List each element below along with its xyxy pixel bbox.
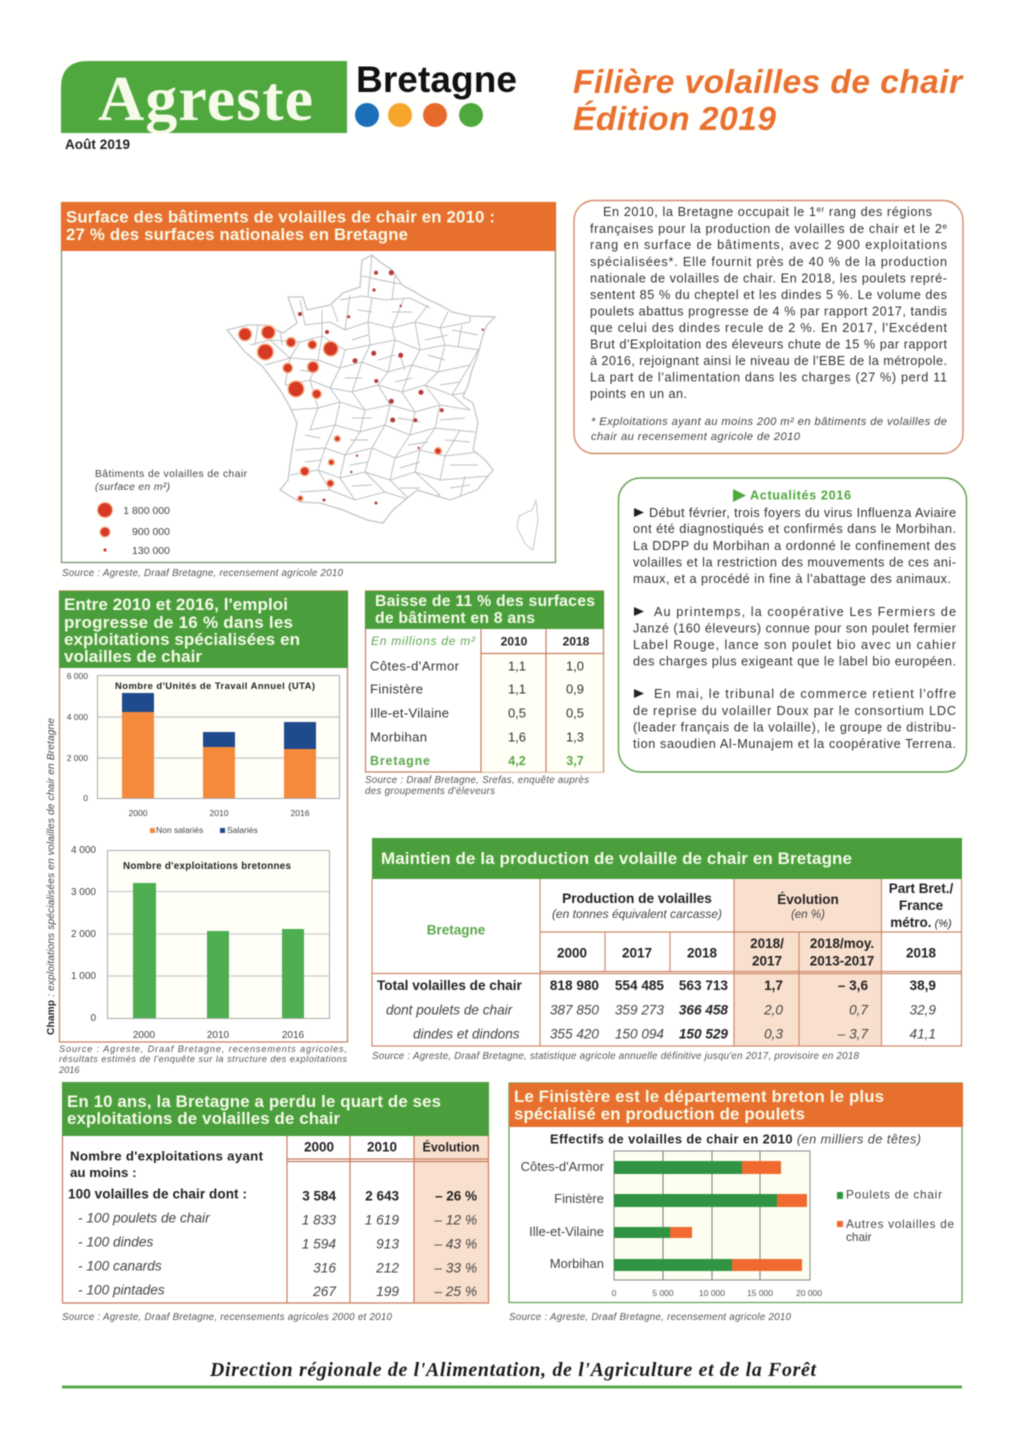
chart: UTA stacked bars: Salariés (227, 825, 258, 835)
table: production: 32,9 (910, 1002, 936, 1018)
table: production: 2000 (557, 946, 587, 960)
table: farms by type: 1 619 (365, 1212, 399, 1228)
table: production: dindes et dindons (413, 1026, 520, 1042)
title: Édition 2019 (573, 100, 776, 138)
footer: Direction régionale de l'Alimentation, de l'Agriculture et de la Forêt (209, 1359, 816, 1381)
text block: intro: rang en surface de bâtiments, avec 2 900 exploitations (590, 238, 947, 252)
map legend: (surface en m²) (95, 482, 170, 493)
text block: actualites: maux, et a procédé in fine à l'abattage des animaux. (633, 572, 951, 586)
table: farms by type: – 12 % (433, 1212, 477, 1228)
chart: UTA stacked bars (67, 671, 340, 835)
horizontal stacked bars: Morbihan (550, 1256, 604, 1271)
source: employment: Source : Agreste, Draaf Bretagne, recensements agricoles, (59, 1044, 347, 1054)
chart: UTA stacked bars: 6 000 (67, 671, 88, 681)
chart: number of farms (71, 845, 330, 1041)
header logo: Agreste Bretagne (61, 59, 517, 152)
chart legend: Autres volailles de (846, 1217, 954, 1231)
footer (62, 1359, 962, 1388)
source: employment: 2016 (58, 1065, 80, 1075)
table: farms by type: 3 584 (302, 1188, 336, 1204)
map legend: 900 000 (132, 526, 170, 538)
bubbles (238, 326, 442, 501)
text block: actualites: Au printemps, la coopérative Les Fermiers de (654, 605, 956, 619)
table: production: France (899, 898, 944, 913)
table: building surface: Finistère (370, 682, 423, 696)
table: building surface: 4,2 (508, 754, 526, 768)
text block: actualites: tion saoudien Al-Munajem et la coopérative Terrena. (633, 737, 956, 751)
table: farms by type: Nombre d'exploitations ayant (70, 1148, 264, 1164)
table: farms by type: 2 643 (365, 1188, 399, 1204)
table: farms by type: – 33 % (433, 1260, 477, 1276)
text block: intro: En 2010, la Bretagne occupait le 1 (603, 205, 816, 219)
table: farms by type: 212 (375, 1260, 399, 1276)
text block: intro: er (817, 205, 825, 214)
table: farms by type: 267 (312, 1284, 337, 1299)
title (573, 64, 964, 138)
horizontal stacked bars: Côtes-d'Armor (521, 1159, 605, 1174)
chart: UTA stacked bars: Non salariés (156, 825, 203, 835)
text block: actualites: volailles et la restriction des mouvements de ces ani- (633, 556, 956, 570)
text block: intro: sentent 85 % du cheptel et les dindes 5 %. Le volume des (590, 288, 947, 302)
table: production: 2013-2017 (810, 954, 874, 968)
table: production: (en %) (791, 909, 825, 921)
table: farms by type: – 26 % (435, 1188, 477, 1204)
table: production: 41,1 (910, 1026, 936, 1042)
text block: actualites: La DDPP du Morbihan a ordonné le confinement des (633, 539, 956, 553)
table: building surface: 3,7 (566, 754, 584, 768)
chart: number of farms: Nombre d'exploitations bretonnes (123, 861, 292, 872)
table: farms by type: - 100 canards (78, 1258, 162, 1274)
table: production: 818 980 (550, 978, 599, 993)
table: building surface: Côtes-d'Armor (370, 658, 460, 674)
panel: employment and farms: Entre 2010 et 2016, l'emploi (64, 595, 288, 614)
horizontal stacked bars: 20 000 (796, 1288, 822, 1298)
source: employment: résultats estimés de l'enquête sur la structure des exploitations (59, 1054, 347, 1064)
chart: number of farms: 0 (90, 1013, 96, 1024)
horizontal stacked bars: Ille-et-Vilaine (529, 1224, 604, 1239)
table: building surface: de bâtiment en 8 ans (375, 610, 535, 627)
panel: Finistere chart: Effectifs de volailles de chair en 2010 (en milliers de têtes) (550, 1132, 921, 1146)
table: production: 554 485 (615, 978, 664, 993)
panel: employment and farms (59, 591, 348, 1042)
table: production: Maintien de la production de volaille de chair en Bretagne (381, 849, 852, 868)
source: Finistere chart: Source : Agreste, Draaf Bretagne, recensement agricole 2010 (509, 1312, 792, 1323)
text block: intro: e (943, 222, 948, 231)
table: production: 2018 (906, 946, 937, 960)
table: production: 2018 (687, 946, 718, 960)
axis label: vertical champ: Champ : exploitations spécialisées en volailles de chair en Bretagne (46, 718, 57, 1035)
header logo: Agreste Bretagne: Agreste (98, 63, 313, 134)
horizontal stacked bars: 15 000 (747, 1288, 773, 1298)
table: production: 2,0 (763, 1002, 783, 1018)
table: production: Bretagne (427, 922, 486, 938)
table: building surface: 1,1 (508, 658, 526, 674)
text block: actualites (618, 478, 966, 772)
table: production: métro. (%) (890, 915, 952, 930)
chart: number of farms: 2010 (207, 1030, 230, 1041)
panel: map of poultry building surface: 27 % des surfaces nationales en Bretagne (66, 225, 408, 244)
text block: actualites: ont été diagnostiqués et confirmés dans le Morbihan. (633, 522, 956, 536)
text block: actualites: Début février, trois foyers du virus Influenza Aviaire (649, 506, 956, 520)
source: farms: Source : Agreste, Draaf Bretagne, recensements agricoles 2000 et 2010 (62, 1312, 393, 1323)
chart: number of farms: 4 000 (71, 845, 96, 856)
panel: employment and farms: exploitations spécialisées en (64, 630, 300, 649)
table: building surface: 2018 (563, 634, 590, 648)
chart: UTA stacked bars: 2 000 (67, 753, 88, 763)
text block: intro: Brut d'Exploitation des éleveurs chute de 15 % par rapport (590, 338, 947, 352)
map legend: 1 800 000 (123, 505, 170, 517)
chart: UTA stacked bars: 0 (83, 793, 88, 803)
table: building surface: En millions de m² (371, 634, 476, 648)
map legend: 130 000 (132, 545, 170, 557)
table: farms by type: – 25 % (433, 1284, 477, 1299)
table: building surface: Morbihan (370, 730, 427, 744)
table: farms by type: 100 volailles de chair dont : (68, 1186, 247, 1202)
text block: intro: * Exploitations ayant au moins 200 m² en bâtiments de volailles de (591, 416, 947, 428)
chart: number of farms: 3 000 (71, 887, 96, 898)
chart legend: Poulets de chair (846, 1188, 942, 1202)
header logo: Agreste Bretagne: Août 2019 (65, 137, 130, 152)
table: production: Évolution (777, 892, 839, 907)
map legend: Bâtiments de volailles de chair (95, 469, 248, 480)
table: building surface: 1,1 (508, 682, 526, 696)
chart: number of farms: 2016 (282, 1030, 305, 1041)
horizontal stacked bars: 0 (612, 1288, 617, 1298)
table: production (372, 838, 962, 1046)
table: production: 150 529 (679, 1026, 728, 1042)
table: farms by type: 1 833 (302, 1212, 336, 1228)
horizontal stacked bars: Finistère (554, 1191, 604, 1206)
france map (227, 255, 538, 550)
chart: UTA stacked bars: 2016 (291, 808, 310, 818)
table: production: 2018/ (750, 936, 784, 951)
panel: Finistere chart: spécialisé en production de poulets (514, 1104, 805, 1124)
text block: actualites: En mai, le tribunal de commerce retient l'offre (654, 687, 956, 701)
table: production: 387 850 (550, 1002, 599, 1018)
table: production: 38,9 (910, 978, 936, 993)
chart: number of farms: 2 000 (71, 929, 96, 940)
text block: intro: à 2016, rejoignant ainsi le niveau de l'EBE de la métropole. (590, 354, 947, 368)
chart: number of farms: 1 000 (71, 971, 96, 982)
table: production: (en tonnes équivalent carcasse) (552, 907, 722, 921)
panel: Finistere chart (509, 1083, 963, 1302)
table: farms by type: – 43 % (433, 1236, 477, 1252)
table: building surface: 0,5 (566, 706, 584, 720)
map legend (95, 469, 248, 557)
table: production: Part Bret./ (889, 881, 954, 896)
text block: intro: points en un an. (590, 387, 687, 401)
table: farms by type: 1 594 (302, 1236, 336, 1252)
table: building surface: 1,6 (508, 730, 526, 744)
table: farms by type: 2010 (367, 1140, 397, 1154)
table: production: Production de volailles (562, 891, 712, 906)
panel: map of poultry building surface: Surface des bâtiments de volailles de chair en 2010 : (66, 208, 495, 226)
text block: actualites: Janzé (160 éleveurs) connue pour son poulet fermier (633, 622, 957, 636)
table: production: 0,7 (849, 1002, 868, 1018)
table: production: 359 273 (615, 1002, 664, 1018)
source: map: Source : Agreste, Draaf Bretagne, recensement agricole 2010 (62, 568, 344, 579)
header logo: Agreste Bretagne: Bretagne (356, 59, 517, 100)
table: production: 2017 (752, 954, 782, 968)
table: farms by type: 913 (376, 1236, 399, 1252)
text block: intro: La part de l'alimentation dans les charges (27 %) perd 11 (590, 370, 947, 384)
text block: actualites: (leader français de la volaille), le groupe de distribu- (633, 720, 956, 734)
table: building surface: 2010 (501, 634, 528, 648)
table: farms by type: En 10 ans, la Bretagne a perdu le quart de ses (67, 1092, 441, 1111)
chart legend: chair (846, 1230, 872, 1244)
table: production: 563 713 (679, 978, 728, 993)
text block: intro (574, 200, 963, 454)
chart legend (837, 1188, 954, 1244)
title: Filière volailles de chair (573, 64, 964, 101)
panel: Finistere chart: Le Finistère est le département breton le plus (514, 1087, 884, 1106)
table: production: dont poulets de chair (386, 1002, 513, 1018)
source: building surface (365, 775, 589, 797)
text block: actualites: de reprise du volailler Doux par le consortium LDC (633, 704, 956, 718)
source: employment (58, 1044, 347, 1075)
chart: UTA stacked bars: Nombre d'Unités de Travail Annuel (UTA) (115, 680, 315, 691)
horizontal stacked bars: 10 000 (699, 1288, 725, 1298)
panel: employment and farms: progresse de 16 % dans les (64, 613, 293, 632)
table: farms by type: - 100 dindes (78, 1234, 153, 1250)
table: production: 2018/moy. (810, 936, 874, 951)
text block: actualites: Label Rouge, lance son poulet bio avec un cahier (633, 638, 957, 652)
horizontal stacked bars (521, 1151, 822, 1298)
table: farms by type: - 100 pintades (78, 1282, 165, 1298)
table: production: 0,3 (764, 1026, 783, 1042)
table: production: Total volailles de chair (377, 978, 523, 993)
table: farms by type: 199 (376, 1284, 399, 1299)
panel: map of poultry building surface (61, 202, 556, 562)
chart: UTA stacked bars: 2000 (129, 808, 148, 818)
text block: intro: poulets abattus progresse de 4 % par rapport 2017, tandis (590, 304, 947, 318)
table: production: 355 420 (550, 1026, 599, 1042)
text block: intro: que celui des dindes recule de 2 %. En 2017, l'Excédent (590, 321, 947, 335)
table: farms by type: au moins : (70, 1165, 136, 1180)
source: building surface: des groupements d'éleveurs (365, 786, 495, 797)
table: building surface: Ille-et-Vilaine (370, 706, 449, 720)
table: farms by type: - 100 poulets de chair (78, 1210, 211, 1226)
chart: UTA stacked bars: 4 000 (67, 712, 88, 722)
table: building surface: 0,5 (508, 706, 526, 720)
table: production: 1,7 (764, 978, 783, 993)
table: farms by type: exploitations de volailles de chair (67, 1109, 340, 1128)
table: production: – 3,7 (837, 1026, 868, 1042)
table: building surface: 0,9 (566, 682, 584, 696)
table: production: 150 094 (615, 1026, 664, 1042)
table: production: 2017 (622, 946, 652, 960)
table: building surface: Baisse de 11 % des surfaces (375, 593, 595, 610)
table: farms by type: 2000 (304, 1140, 334, 1154)
table: production: 366 458 (679, 1002, 728, 1018)
table: farms by type: Évolution (423, 1140, 479, 1154)
table: building surface: 1,0 (566, 658, 584, 674)
source: building surface: Source : Draaf Bretagne, Srefas, enquête auprès (365, 775, 589, 786)
table: farms by type (62, 1082, 489, 1303)
chart: number of farms: 2000 (133, 1030, 156, 1041)
text block: actualites: des charges plus exigeant que le label bio européen. (633, 654, 956, 668)
text block: intro: chair au recensement agricole de 2010 (591, 431, 801, 443)
table: building surface: 1,3 (566, 730, 584, 744)
text block: intro: françaises pour la production de volailles de chair et le 2 (590, 222, 942, 236)
panel: employment and farms: volailles de chair (64, 647, 202, 666)
corsica (517, 500, 538, 550)
horizontal stacked bars: 5 000 (652, 1288, 674, 1298)
text block: intro: rang des régions (825, 205, 932, 219)
text block: actualites: Actualités 2016 (750, 488, 851, 502)
table: building surface: Bretagne (370, 754, 430, 768)
table: farms by type: 316 (313, 1260, 336, 1276)
text block: intro: nationale de volailles de chair. En 2018, les poulets repré- (590, 272, 947, 286)
table: building surface (365, 591, 604, 772)
chart: UTA stacked bars: 2010 (210, 808, 229, 818)
text block: intro: spécialisées*. Elle fournit près de 40 % de la production (590, 255, 947, 269)
source: production: Source : Agreste, Draaf Bretagne, statistique agricole annuelle définitive jusqu'en 2017, provisoire en 2018 (372, 1051, 860, 1062)
table: production: – 3,6 (838, 978, 868, 993)
